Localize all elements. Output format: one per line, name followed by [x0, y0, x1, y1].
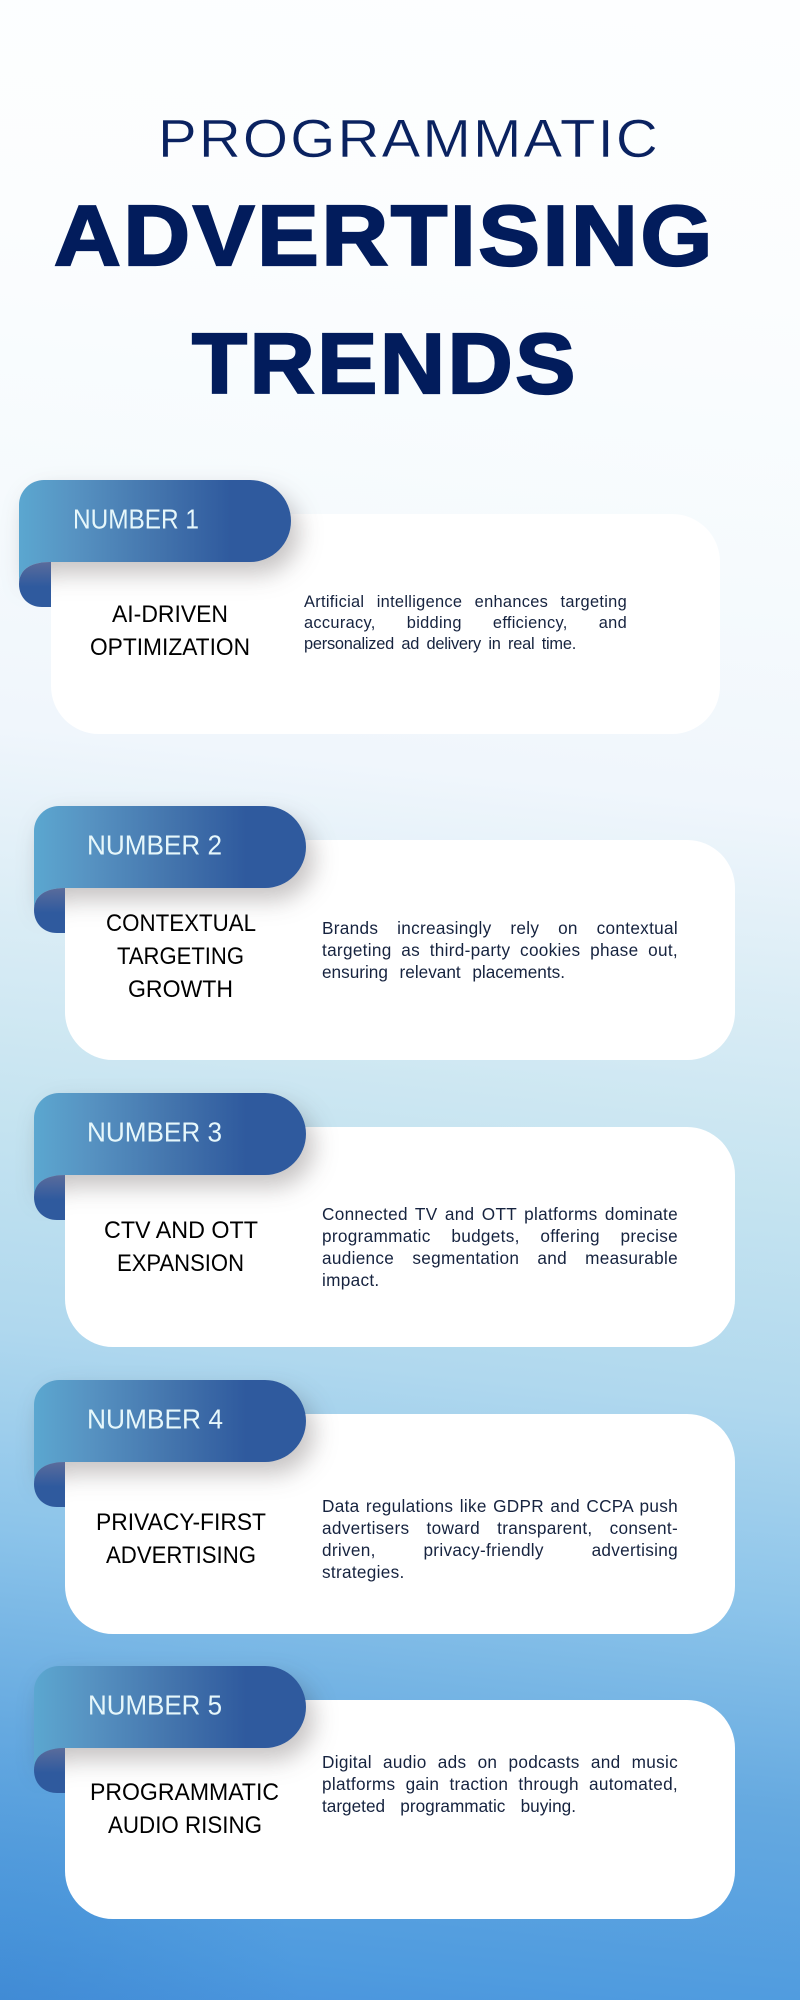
heading [104, 1217, 258, 1277]
ribbon [19, 480, 291, 584]
description: programmatic budgets, offering precise [322, 1226, 678, 1246]
card [65, 840, 735, 1060]
panel: number 4 [30, 1380, 735, 1634]
card [51, 514, 720, 734]
description: ensuring relevant placements. [322, 962, 565, 982]
ribbon label: NUMBER 4 [87, 1404, 223, 1434]
title [54, 109, 715, 410]
ribbon label: NUMBER 3 [87, 1116, 222, 1148]
ribbon fold [34, 1748, 65, 1793]
card [65, 1127, 735, 1347]
description: personalized ad delivery in real time. [304, 635, 576, 653]
heading: PROGRAMMATIC [90, 1779, 279, 1806]
panel: number 2 [30, 806, 735, 1060]
description [322, 1752, 678, 1816]
description [322, 1496, 678, 1582]
panel: number 5 [30, 1666, 735, 1919]
ribbon [34, 806, 306, 910]
ribbon fold [34, 1462, 65, 1507]
ribbon label: NUMBER 5 [88, 1690, 222, 1720]
description: driven, privacy-friendly advertising [322, 1540, 678, 1560]
heading: AI-DRIVEN [112, 601, 228, 628]
heading: PRIVACY-FIRST [96, 1509, 266, 1536]
ribbon label: NUMBER 2 [87, 830, 222, 860]
description: Artificial intelligence enhances targeting [304, 593, 627, 611]
ribbon fold [34, 888, 65, 933]
ribbon fold [34, 1175, 65, 1220]
title: TRENDS [192, 317, 578, 410]
description: audience segmentation and measurable [322, 1248, 678, 1268]
description: Data regulations like GDPR and CCPA push [322, 1496, 678, 1516]
ribbon [34, 1380, 306, 1484]
heading: ADVERTISING [106, 1542, 256, 1569]
description: targeting as third-party cookies phase out, [322, 940, 678, 960]
description: advertisers toward transparent, consent- [322, 1518, 678, 1538]
heading: GROWTH [128, 976, 233, 1003]
heading [90, 1779, 279, 1839]
description: Brands increasingly rely on contextual [322, 918, 678, 938]
heading: CTV AND OTT [104, 1217, 258, 1244]
ribbon [34, 1666, 306, 1770]
heading [90, 601, 250, 661]
ribbon [34, 1093, 306, 1197]
ribbon label: NUMBER 1 [73, 504, 199, 534]
panel: number 3 [30, 1093, 735, 1347]
heading [96, 1509, 266, 1569]
description [322, 918, 678, 982]
heading: EXPANSION [117, 1250, 244, 1277]
description: targeted programmatic buying. [322, 1796, 576, 1816]
panel: number 1 [15, 480, 720, 734]
description [304, 593, 627, 653]
title: PROGRAMMATIC [158, 109, 660, 169]
card [65, 1414, 735, 1634]
description: platforms gain traction through automated, [322, 1774, 678, 1794]
description: impact. [322, 1270, 380, 1290]
heading: AUDIO RISING [108, 1812, 262, 1839]
description: accuracy, bidding efficiency, and [304, 614, 627, 632]
description: strategies. [322, 1562, 405, 1582]
heading: CONTEXTUAL [106, 910, 256, 937]
card [65, 1700, 735, 1919]
description: Digital audio ads on podcasts and music [322, 1752, 678, 1772]
heading: OPTIMIZATION [90, 634, 250, 661]
description: Connected TV and OTT platforms dominate [322, 1204, 678, 1224]
description [322, 1204, 678, 1290]
title: ADVERTISING [54, 189, 715, 284]
ribbon fold [19, 562, 51, 607]
heading [106, 910, 256, 1003]
heading: TARGETING [117, 943, 244, 970]
